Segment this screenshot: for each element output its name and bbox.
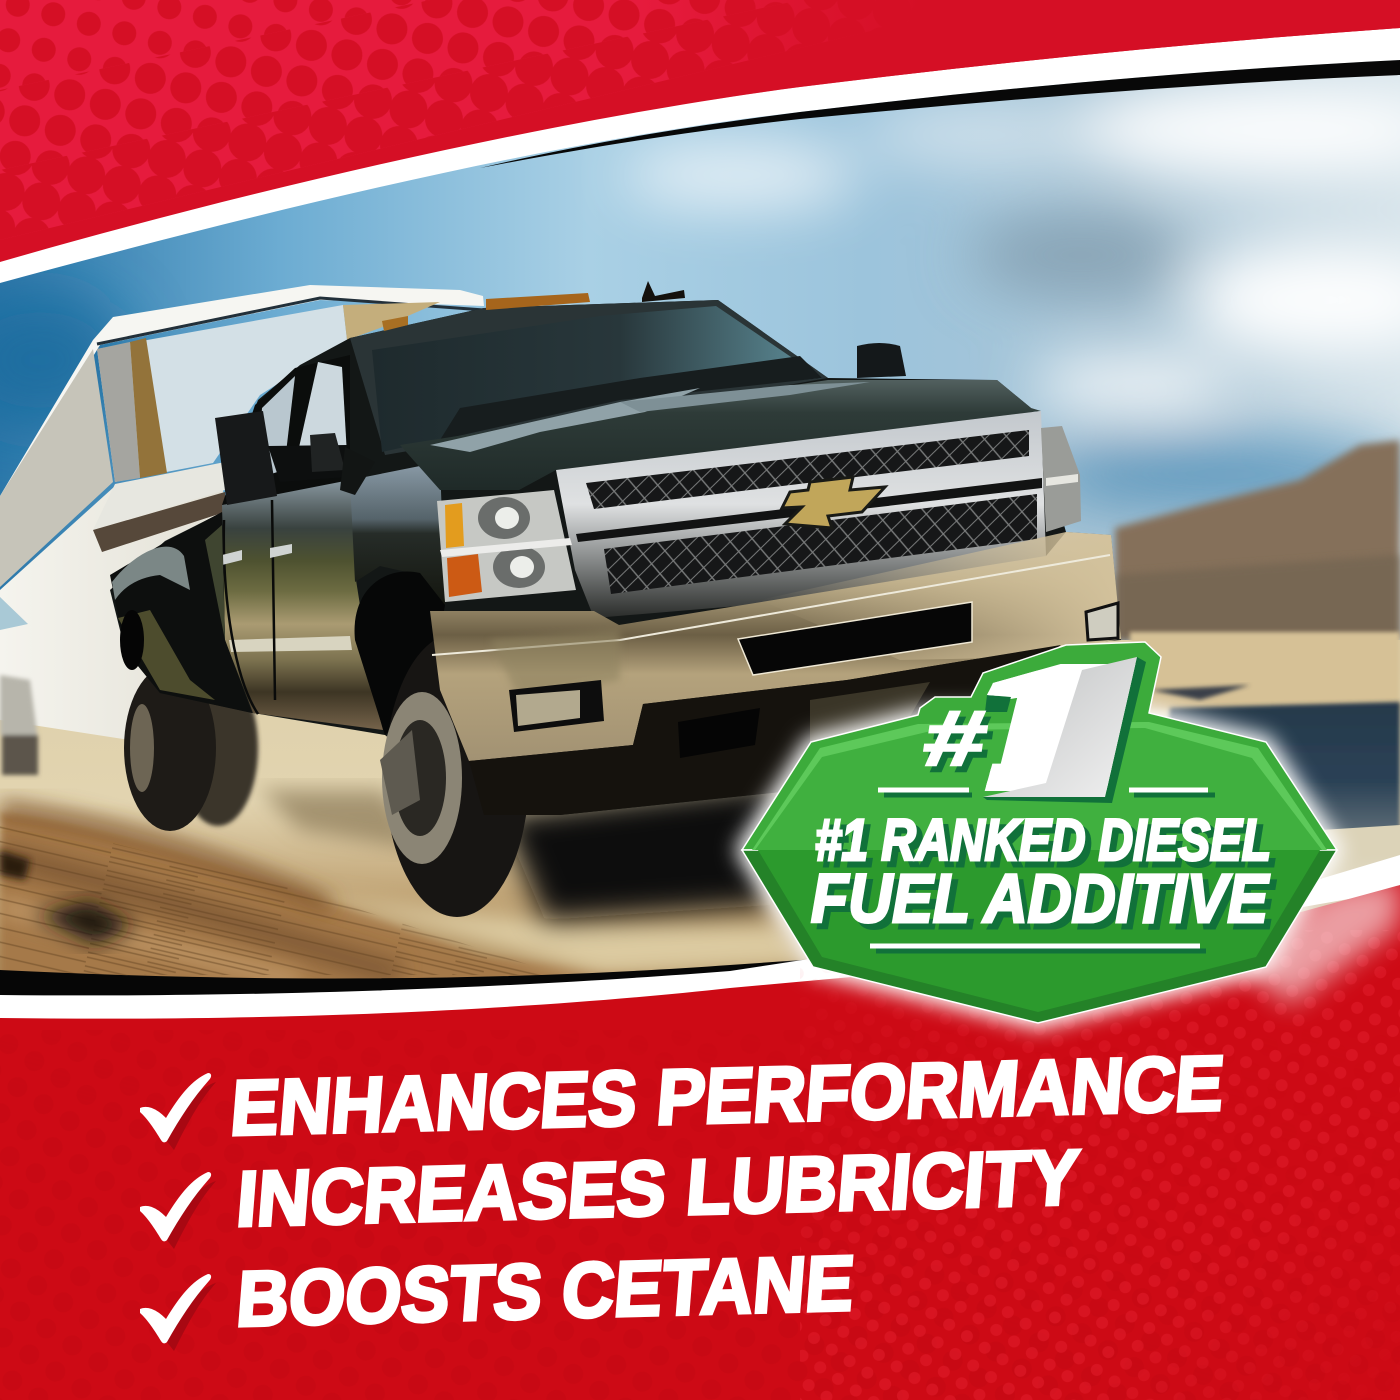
fog lamp right [1086,603,1118,640]
text: INCREASES LUBRICITY [234,1133,1082,1243]
cab lights [486,293,590,310]
right headlight [1041,426,1081,532]
photo background: sky and road [0,40,1400,1000]
lower grille [604,494,1037,594]
side window frame [222,355,350,505]
trailer [0,285,484,775]
benefit 2 [140,1133,1082,1249]
trailer roof [0,285,484,500]
fog lamp left [509,680,604,732]
icon: check mark [140,1274,216,1351]
ground [0,640,1400,1000]
rule bottom [876,948,1206,954]
trailer front window [97,305,347,482]
rule left and right [884,792,1215,798]
icon: check mark [140,1073,216,1150]
hash sign: # [919,695,992,782]
door handles [222,544,292,565]
top black stripe [480,60,1400,168]
badge line one: #1 RANKED DIESEL [821,814,1277,879]
rear fender [110,512,252,713]
distant rocks [1115,440,1400,640]
badge: #1 ranked diesel fuel additive [742,632,1337,1023]
front wheel [380,633,529,917]
top white swoosh [0,22,1400,283]
road streaks [0,812,760,985]
front wheel arch [355,572,445,735]
badge glow [742,713,1400,1023]
icon: check mark [140,1172,216,1249]
hash sign: # [924,701,997,788]
bottom black stripe [0,958,830,996]
badge line two: FUEL ADDITIVE [817,866,1276,943]
badge line one: #1 RANKED DIESEL [815,808,1271,873]
side windows [258,362,347,478]
icon: bowtie emblem [782,477,885,528]
badge shape [742,642,1337,850]
front quarter panel [350,462,445,605]
right mirror [857,343,906,378]
trailer upper side panel [0,349,113,587]
text: BOOSTS CETANE [234,1239,857,1343]
benefit 3 [140,1239,857,1351]
roof and windshield frame [350,300,828,455]
bottom red panel [0,885,1400,1400]
pickup truck [110,281,1121,920]
door panel [222,478,383,730]
hood [400,380,1041,490]
upper grille [586,430,1029,509]
bumper slot [738,602,972,675]
benefit 1 [140,1039,1227,1152]
side mirror [215,411,375,505]
trailer lower side [0,468,225,740]
bottom white stripe [0,855,1400,1019]
rear wheels [124,665,258,831]
left headlight [437,490,576,602]
ground shadow [500,780,790,920]
grille surround [556,411,1046,618]
body silhouette [110,300,1121,815]
badge line two: FUEL ADDITIVE [811,860,1270,937]
trailer wheel [0,675,38,775]
trailer under-band [93,462,225,530]
front bumper [430,532,1121,761]
clouds [0,82,1400,509]
big numeral one: 1 [868,632,1237,822]
big numeral one [983,657,1146,803]
top red banner with halftone dots [0,0,1400,262]
lower valance [469,645,1061,815]
text: ENHANCES PERFORMANCE [228,1039,1227,1152]
